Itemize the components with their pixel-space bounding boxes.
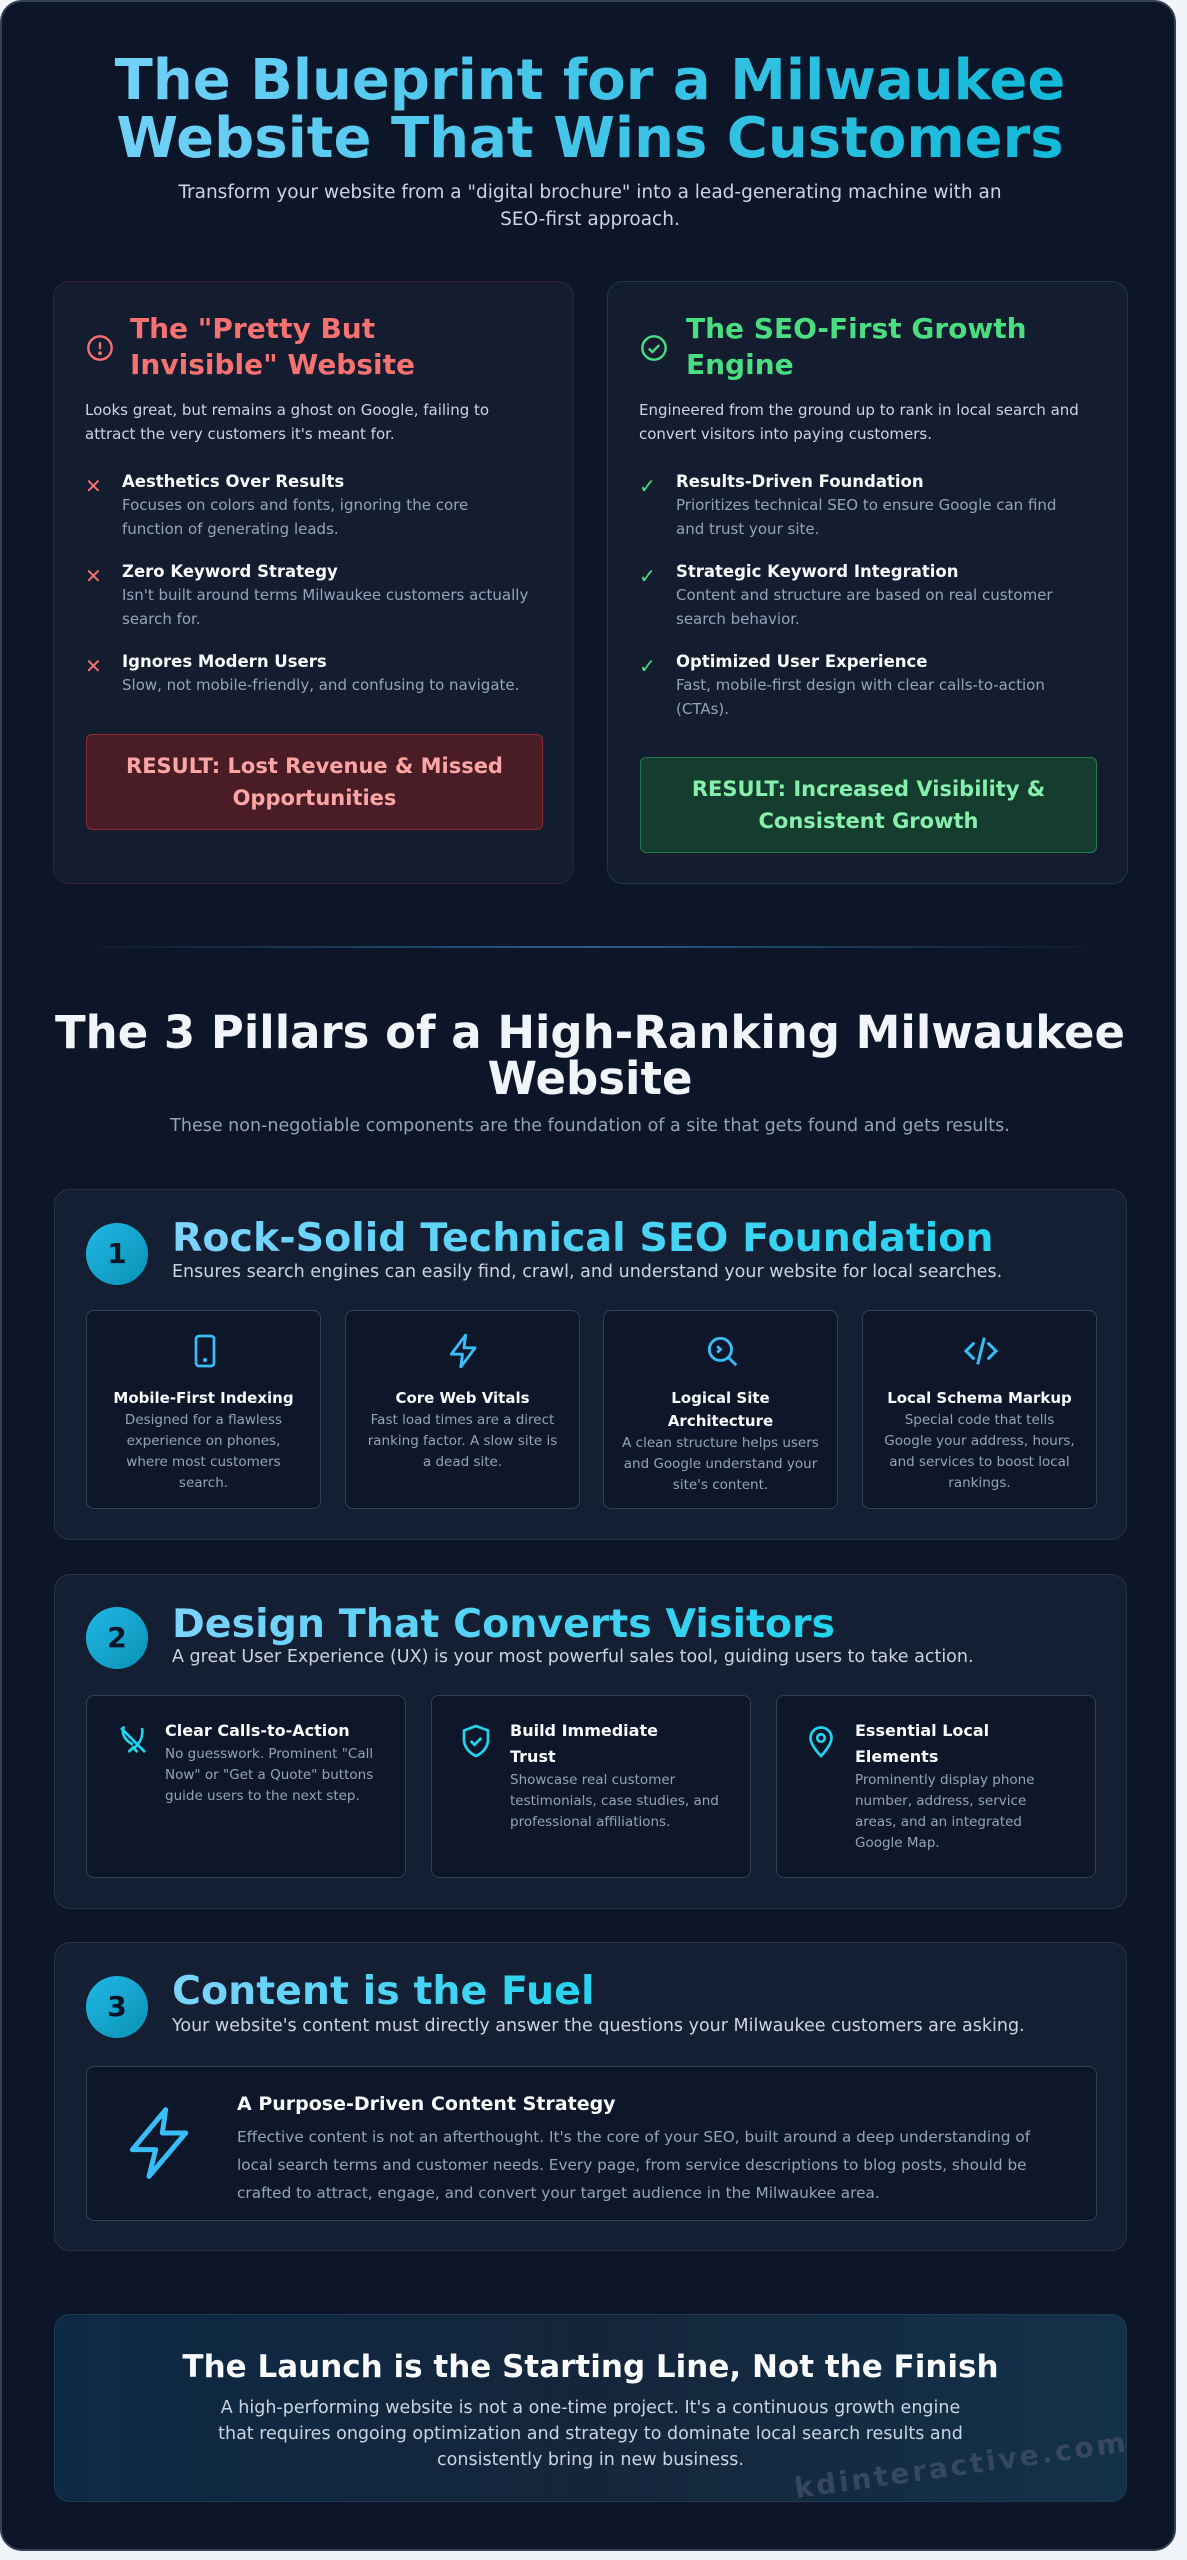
icon: shield: [462, 1724, 490, 1758]
icon: map pin: [809, 1726, 833, 1758]
subtitle: Transform your website from a "digital brochure" into a lead-generating machine with an SEO-first approach.: [178, 182, 1002, 230]
result box: Opportunities: [233, 786, 396, 810]
panel: pillar 3: [54, 1942, 1127, 2251]
card: content strategy: [86, 2066, 1097, 2221]
item 1: Focuses on colors and fonts, ignoring the core function of generating leads.: [122, 496, 468, 538]
item 1: ✕: [85, 474, 102, 498]
heading: [686, 312, 1027, 381]
card: core web vitals: Core Web Vitals: [395, 1389, 530, 1407]
result box: Consistent Growth: [758, 809, 978, 833]
item 1: [639, 472, 1056, 538]
item 3: Slow, not mobile-friendly, and confusing to navigate.: [122, 676, 519, 694]
card: local schema: [862, 1310, 1097, 1509]
number badge 3: [86, 1976, 148, 2038]
number badge 3: 3: [107, 1990, 127, 2023]
panel: pillar 1: [54, 1189, 1127, 1540]
description: A great User Experience (UX) is your most powerful sales tool, guiding users to take action.: [172, 1647, 974, 1667]
card: local schema: Special code that tells Google your address, hours, and services to boost local rankings.: [884, 1412, 1075, 1491]
description: Engineered from the ground up to rank in local search and convert visitors into paying customers.: [639, 401, 1079, 443]
description: Your website's content must directly answer the questions your Milwaukee customers are asking.: [172, 2016, 1025, 2036]
card: mobile-first: [86, 1310, 321, 1509]
icon: code: [964, 1337, 998, 1365]
pillars heading: The 3 Pillars of a High-Ranking Milwaukee: [55, 1006, 1125, 1059]
heading: Invisible" Website: [130, 348, 415, 381]
item 2: Zero Keyword Strategy: [122, 562, 338, 581]
card: logical site architecture: A clean structure helps users and Google understand your site's content.: [622, 1435, 819, 1493]
item 2: ✓: [639, 564, 656, 588]
number badge 1: 1: [107, 1237, 127, 1270]
item 3: Ignores Modern Users: [122, 652, 327, 671]
card: local elements: Elements: [855, 1747, 938, 1766]
heading: Content is the Fuel: [172, 1968, 594, 2014]
item 1: Aesthetics Over Results: [122, 472, 344, 491]
heading: Design That Converts Visitors: [172, 1601, 835, 1647]
item 1: [85, 472, 468, 538]
number badge 2: 2: [107, 1621, 127, 1654]
card: local schema: Local Schema Markup: [887, 1389, 1072, 1407]
title: Website That Wins Customers: [116, 106, 1064, 171]
card: trust: Build Immediate: [510, 1721, 658, 1740]
number badge 1: [86, 1223, 148, 1285]
heading: Engine: [686, 348, 794, 381]
item 2: Strategic Keyword Integration: [676, 562, 958, 581]
item 3: ✓: [639, 654, 656, 678]
description: Looks great, but remains a ghost on Google, failing to attract the very customers it's meant for.: [85, 401, 489, 443]
card: core web vitals: Fast load times are a direct ranking factor. A slow site is a dead site.: [368, 1412, 557, 1470]
heading: The "Pretty But: [130, 312, 375, 345]
item 3: Optimized User Experience: [676, 652, 928, 671]
description: Ensures search engines can easily find, crawl, and understand your website for local searches.: [172, 1262, 1002, 1282]
icon: check circle: [641, 335, 667, 361]
result box: RESULT: Increased Visibility &: [692, 777, 1045, 801]
heading: The SEO-First Growth: [686, 312, 1027, 345]
icon: search: [708, 1336, 738, 1366]
card: logical site architecture: Logical Site: [671, 1389, 770, 1407]
item 2: Content and structure are based on real customer search behavior.: [676, 586, 1053, 628]
item 1: Prioritizes technical SEO to ensure Google can find and trust your site.: [676, 496, 1056, 538]
item 2: [639, 562, 1053, 628]
item 2: Isn't built around terms Milwaukee customers actually search for.: [122, 586, 528, 628]
item 3: Fast, mobile-first design with clear calls-to-action (CTAs).: [676, 676, 1045, 718]
card: content strategy: A Purpose-Driven Content Strategy: [237, 2093, 616, 2115]
card: CTAs: [86, 1695, 406, 1878]
card: trust: Trust: [510, 1747, 556, 1766]
pillars heading: [55, 1006, 1125, 1105]
card: logical site architecture: [603, 1310, 838, 1509]
card: logical site architecture: Architecture: [668, 1412, 773, 1430]
card: mobile-first: Mobile-First Indexing: [113, 1389, 294, 1407]
card: trust: [431, 1695, 751, 1878]
item 1: Results-Driven Foundation: [676, 472, 924, 491]
icon: phone: [194, 1334, 216, 1368]
card: mobile-first: Designed for a flawless experience on phones, where most customers search.: [125, 1412, 282, 1491]
icon: big lightning: [130, 2107, 188, 2179]
card: content strategy: Effective content is not an afterthought. It's the core of your SEO, built around a deep understanding of local search terms and customer needs. Every page, from service descriptions to blog posts, should be crafted to attract, engage, and convert your target audience in the Milwaukee area.: [237, 2128, 1030, 2202]
result box: [640, 757, 1097, 853]
card: trust: Showcase real customer testimonials, case studies, and professional affiliations.: [510, 1772, 719, 1830]
result box: [86, 734, 543, 830]
item 3: [639, 652, 1045, 718]
item 3: [85, 652, 519, 694]
card: local elements: Prominently display phone number, address, service areas, and an integrated Google Map.: [855, 1772, 1035, 1851]
launch text: A high-performing website is not a one-time project. It's a continuous growth engine that requires ongoing optimization and strategy to dominate local search results and consistently bring in new business.: [218, 2398, 963, 2470]
pillars heading: Website: [487, 1052, 692, 1105]
icon: warning circle: [87, 335, 113, 361]
card: local elements: [776, 1695, 1096, 1878]
card: CTAs: No guesswork. Prominent "Call Now" or "Get a Quote" buttons guide users to the next step.: [165, 1746, 373, 1804]
item 1: ✓: [639, 474, 656, 498]
watermark: kdinteractive.com: [792, 2425, 1130, 2505]
card: core web vitals: [345, 1310, 580, 1509]
pillars subtitle: These non-negotiable components are the foundation of a site that gets found and gets results.: [170, 1116, 1010, 1136]
icon: tap: [120, 1726, 146, 1753]
title: The Blueprint for a Milwaukee: [115, 48, 1065, 113]
heading: Rock-Solid Technical SEO Foundation: [172, 1215, 994, 1261]
panel: pillar 2: [54, 1574, 1127, 1909]
number badge 2: [86, 1607, 148, 1669]
launch title: The Launch is the Starting Line, Not the Finish: [182, 2349, 999, 2385]
title: [2, 52, 1178, 168]
panel: SEO-first growth engine: [607, 281, 1128, 884]
heading: [130, 312, 415, 381]
card: CTAs: Clear Calls-to-Action: [165, 1721, 350, 1740]
panel: launch: [54, 2314, 1127, 2502]
card: local elements: Essential Local: [855, 1721, 989, 1740]
item 2: ✕: [85, 564, 102, 588]
item 3: ✕: [85, 654, 102, 678]
icon: lightning: [450, 1334, 477, 1368]
result box: RESULT: Lost Revenue & Missed: [126, 754, 503, 778]
item 2: [85, 562, 528, 628]
panel: pretty but invisible: [53, 281, 574, 884]
